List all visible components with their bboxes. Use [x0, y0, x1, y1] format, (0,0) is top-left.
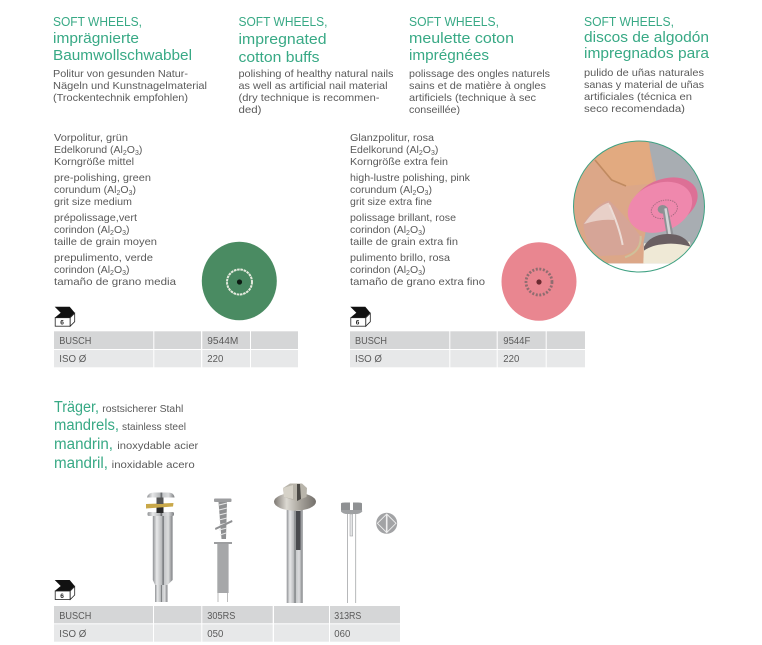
text: English description: polishing of healthy natural nails: [238, 68, 394, 80]
heading: English: [238, 14, 328, 66]
table: mandrels 305RS and 313RS: 313RS: [334, 611, 362, 622]
text block: pink wheel properties: grit size extra fine: [350, 196, 432, 208]
table: mandrels 305RS and 313RS: 305RS: [207, 611, 236, 622]
text block: green wheel properties: ): [126, 224, 130, 236]
text block: green wheel properties: Korngröße mittel: [54, 156, 134, 168]
text block: green wheel properties: 2: [110, 230, 114, 237]
heading: French: SOFT WHEELS,: [409, 14, 499, 29]
heading: German: imprägnierte: [53, 31, 139, 47]
text: English description: (dry technique is recommen-: [238, 92, 380, 104]
heading: German: [53, 14, 192, 64]
text block: green wheel properties: 3: [122, 270, 126, 277]
table: green wheel 9544M: 220: [207, 354, 224, 365]
text block: pink wheel properties: high-lustre polishing, pink: [350, 172, 471, 184]
text block: green wheel properties: corindon (Al: [54, 264, 110, 276]
text block: pink wheel properties: taille de grain extra fin: [350, 236, 458, 248]
text block: green wheel properties: O: [114, 224, 122, 236]
text: German description: (Trockentechnik empfohlen): [53, 92, 188, 104]
icon: pack of 6 box (mandrels): 6: [60, 593, 64, 600]
heading: mandrels in four languages: mandrels,: [54, 417, 119, 434]
column: Spanish title and description: [584, 14, 710, 115]
text block: pink wheel properties: 3: [425, 190, 429, 197]
icon: pack of 6 box (mandrels): [55, 580, 75, 600]
table: pink wheel 9544F: ISO Ø: [355, 354, 382, 365]
heading: mandrels in four languages: inoxidable acero: [112, 459, 195, 471]
text block: pink wheel properties: 3: [418, 270, 422, 277]
icon: mandrel photo, screw with brass washer: [146, 492, 174, 602]
text block: green wheel properties: corundum (Al: [54, 184, 116, 196]
text block: pink wheel properties: 2: [412, 190, 416, 197]
heading: English: impregnated: [238, 32, 326, 48]
text block: green wheel properties: 3: [135, 150, 139, 157]
icon: pack of 6 box (pink wheel): 6: [356, 320, 360, 327]
heading: German: Baumwollschwabbel: [53, 48, 192, 64]
column: French title and description: [409, 14, 550, 116]
text block: pink wheel properties: [350, 132, 485, 288]
heading: mandrels in four languages: [54, 399, 199, 472]
table: green wheel 9544M: BUSCH: [59, 336, 91, 347]
table: green wheel 9544M: [54, 331, 298, 367]
text block: pink wheel properties: Edelkorund (Al: [350, 144, 419, 156]
icon: pink polishing wheel: [502, 242, 576, 321]
heading: Spanish: [584, 14, 710, 62]
text block: green wheel properties: ): [139, 144, 142, 156]
table: pink wheel 9544F: 220: [503, 354, 520, 365]
icon: mandrel photo, slotted hex head: [274, 484, 316, 603]
text: Spanish description: sanas y material de uñas: [584, 79, 704, 91]
text: English description: ded): [238, 104, 262, 116]
text: German description: [53, 68, 207, 104]
heading: Spanish: discos de algodón: [584, 30, 709, 46]
text block: green wheel properties: O: [127, 144, 135, 156]
heading: French: imprégnées: [409, 48, 489, 64]
text block: pink wheel properties: O: [410, 224, 418, 236]
text block: pink wheel properties: Korngröße extra fein: [350, 156, 448, 168]
heading: French: meulette coton: [409, 31, 514, 47]
table: mandrels 305RS and 313RS: ISO Ø: [59, 629, 87, 640]
heading: German: SOFT WHEELS,: [53, 14, 142, 29]
text block: pink wheel properties: corindon (Al: [350, 224, 406, 236]
text block: green wheel properties: prépolissage,vert: [54, 212, 137, 224]
text block: pink wheel properties: ): [422, 224, 426, 236]
text: Spanish description: artificiales (técnica en: [584, 91, 692, 103]
text block: pink wheel properties: ): [428, 184, 432, 196]
icon: green polishing wheel: [202, 242, 277, 320]
text block: pink wheel properties: 3: [431, 150, 435, 157]
text block: green wheel properties: 3: [122, 230, 126, 237]
heading: mandrels in four languages: mandrin,: [54, 436, 113, 453]
text: Spanish description: pulido de uñas naturales: [584, 67, 704, 79]
heading: English: cotton buffs: [238, 50, 320, 66]
text: French description: [409, 68, 550, 116]
text block: pink wheel properties: O: [410, 264, 418, 276]
heading: mandrels in four languages: inoxydable acier: [117, 440, 199, 452]
icon: mandrel drawing, screw and sleeve: [214, 498, 232, 602]
text block: pink wheel properties: 2: [406, 230, 410, 237]
text block: green wheel properties: O: [114, 264, 122, 276]
table: mandrels 305RS and 313RS: 050: [207, 629, 224, 640]
table: pink wheel 9544F: [350, 331, 585, 367]
text block: green wheel properties: pre-polishing, green: [54, 172, 151, 184]
icon: pack of 6 box (green wheel): [55, 307, 75, 327]
text: Spanish description: seco recomendada): [584, 103, 685, 115]
text block: pink wheel properties: O: [416, 184, 425, 196]
text block: green wheel properties: taille de grain moyen: [54, 236, 157, 248]
icon: pack of 6 box (green wheel): 6: [60, 320, 64, 327]
heading: mandrels in four languages: Träger,: [54, 399, 99, 416]
text block: pink wheel properties: ): [422, 264, 426, 276]
text block: pink wheel properties: O: [423, 144, 431, 156]
heading: Spanish: SOFT WHEELS,: [584, 14, 674, 29]
text block: pink wheel properties: Glanzpolitur, rosa: [350, 132, 434, 144]
table: green wheel 9544M: ISO Ø: [59, 354, 87, 365]
table: green wheel 9544M: 9544M: [207, 336, 238, 347]
heading: English: SOFT WHEELS,: [238, 14, 328, 29]
text block: green wheel properties: Edelkorund (Al: [54, 144, 123, 156]
text: Spanish description: [584, 67, 704, 115]
column: English title and description: [238, 14, 394, 116]
text: English description: as well as artificial nail material: [238, 80, 388, 92]
text block: green wheel properties: 2: [110, 270, 114, 277]
column: German title and description: [53, 14, 207, 104]
text block: green wheel properties: prepulimento, verde: [54, 252, 153, 264]
text block: pink wheel properties: tamaño de grano extra fino: [350, 276, 485, 288]
heading: mandrels in four languages: rostsicherer Stahl: [102, 403, 183, 415]
text block: pink wheel properties: corindon (Al: [350, 264, 406, 276]
text: English description: [238, 68, 394, 116]
text block: green wheel properties: corindon (Al: [54, 224, 110, 236]
text block: green wheel properties: 2: [123, 150, 127, 157]
text: German description: Politur von gesunden Natur-: [53, 68, 189, 80]
text block: green wheel properties: [54, 132, 176, 288]
text block: pink wheel properties: polissage brillant, rose: [350, 212, 456, 224]
table: pink wheel 9544F: BUSCH: [355, 336, 387, 347]
text: French description: sains et de matière à ongles: [409, 80, 546, 92]
text block: pink wheel properties: 3: [418, 230, 422, 237]
heading: French: [409, 14, 514, 64]
text: French description: conseillée): [409, 104, 460, 116]
heading: mandrels in four languages: mandril,: [54, 455, 108, 472]
table: mandrels 305RS and 313RS: [54, 606, 400, 642]
text: French description: artificiels (technique à sec: [409, 92, 536, 104]
icon: pack of 6 box (pink wheel): [350, 307, 370, 327]
text block: green wheel properties: O: [120, 184, 129, 196]
table: mandrels 305RS and 313RS: BUSCH: [59, 611, 91, 622]
text block: green wheel properties: ): [126, 264, 130, 276]
text block: green wheel properties: ): [132, 184, 136, 196]
text: French description: polissage des ongles naturels: [409, 68, 550, 80]
text block: green wheel properties: tamaño de grano media: [54, 276, 176, 288]
table: mandrels 305RS and 313RS: 060: [334, 629, 351, 640]
photo: wheel on handpiece against a fingernail: [570, 137, 710, 272]
text block: green wheel properties: Vorpolitur, grün: [54, 132, 128, 144]
text: German description: Nägeln und Kunstnagelmaterial: [53, 80, 207, 92]
icon: mandrel drawing, outline with cross section: [341, 502, 397, 603]
text block: pink wheel properties: corundum (Al: [350, 184, 412, 196]
table: pink wheel 9544F: 9544F: [503, 336, 530, 347]
heading: mandrels in four languages: stainless steel: [122, 421, 186, 433]
text block: green wheel properties: grit size medium: [54, 196, 132, 208]
heading: Spanish: impregnados para: [584, 46, 710, 62]
text block: green wheel properties: 2: [116, 190, 120, 197]
text block: pink wheel properties: 2: [406, 270, 410, 277]
text block: green wheel properties: 3: [129, 190, 133, 197]
text block: pink wheel properties: pulimento brillo, rosa: [350, 252, 450, 264]
text block: pink wheel properties: 2: [419, 150, 423, 157]
text block: pink wheel properties: ): [435, 144, 438, 156]
